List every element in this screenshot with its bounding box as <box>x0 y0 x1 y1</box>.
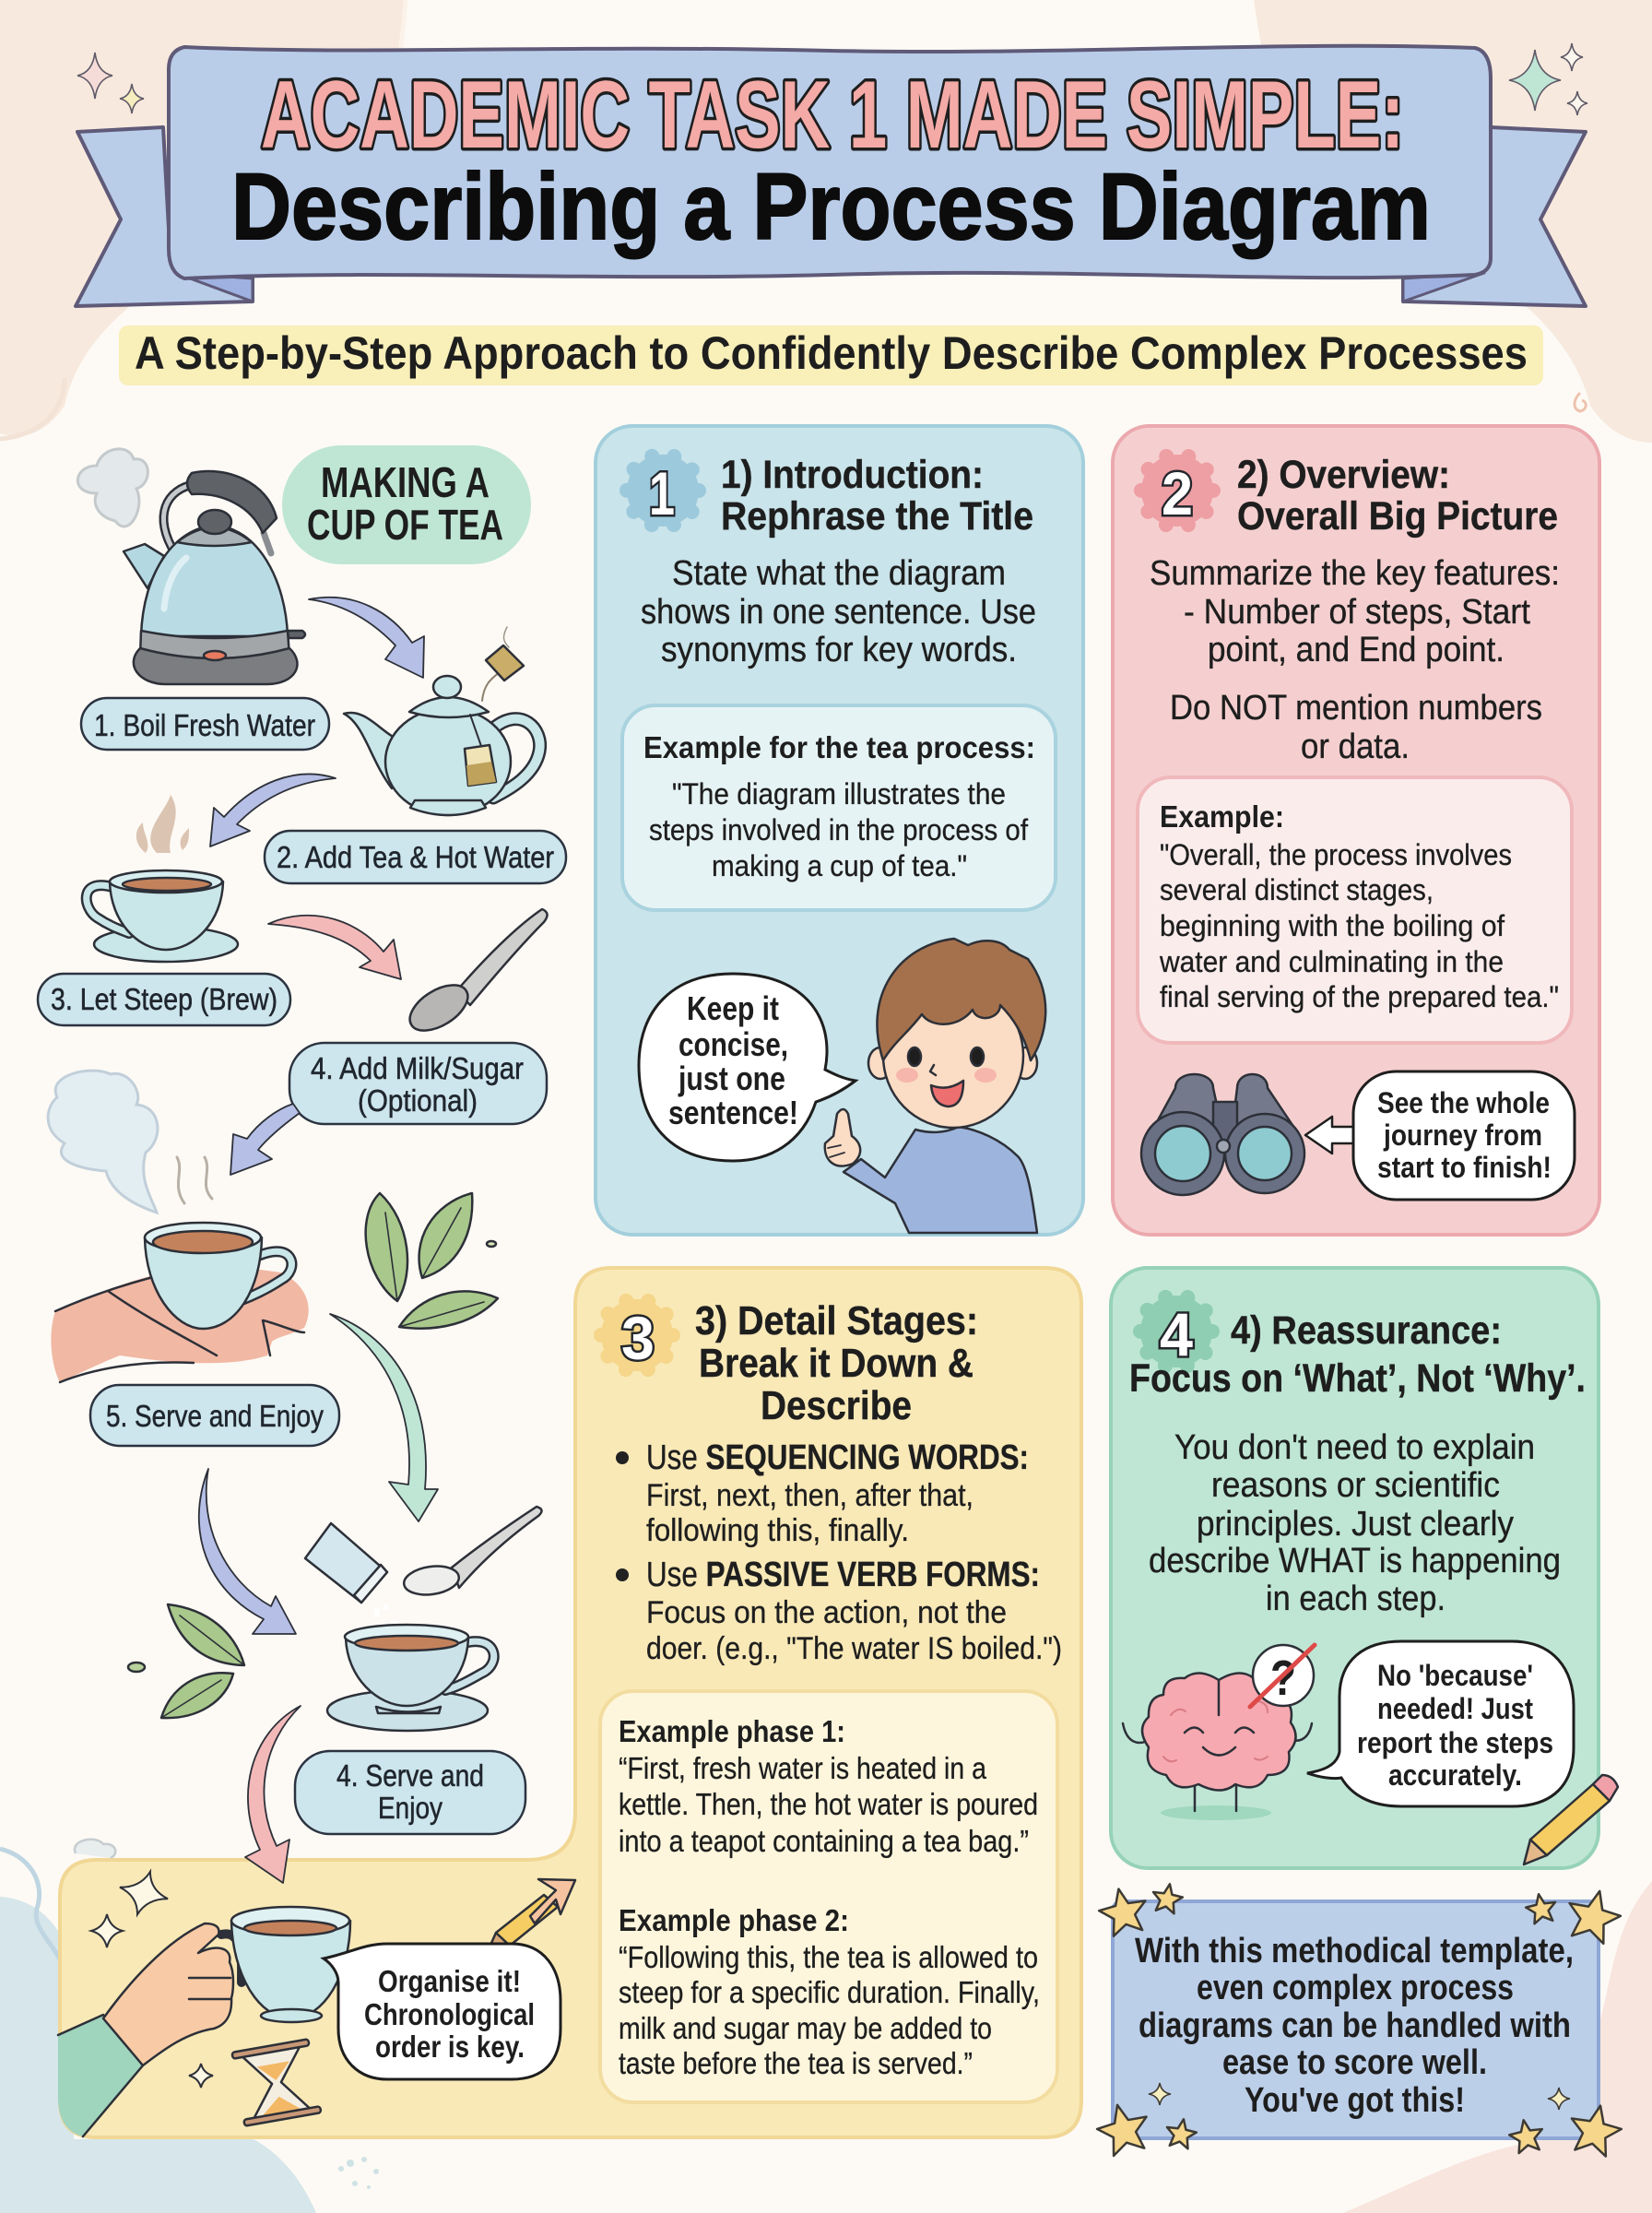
example phases box: “First, fresh water is heated in a <box>619 1751 987 1785</box>
tea process title pill: MAKING A <box>321 458 490 506</box>
panel 4 heading: 4) Reassurance: <box>1231 1308 1502 1353</box>
panel 2 body: Summarize the key features: <box>1150 554 1560 593</box>
sparkles top left <box>77 53 144 113</box>
example phases box: Example phase 1: <box>619 1714 845 1748</box>
icon: cup with saucer 2 <box>327 1625 494 1731</box>
question mark with red slash <box>1250 1645 1315 1707</box>
badge 2: 2 <box>1162 459 1193 527</box>
step 4b label: Enjoy <box>378 1791 442 1825</box>
bullet: sequencing words: First, next, then, after that, <box>646 1478 974 1513</box>
panel 3 heading: Describe <box>761 1383 912 1428</box>
icon: small spoon <box>402 1507 542 1598</box>
speech bubble: no because: No 'because' <box>1377 1659 1533 1692</box>
bullet: passive verb forms: Focus on the action, not the <box>646 1595 1007 1630</box>
icon: binoculars <box>1141 1074 1304 1195</box>
panel: 4 reassurance <box>1111 1268 1618 1868</box>
question mark with red slash: ? <box>1270 1651 1296 1706</box>
panel 1 background <box>596 426 1083 1235</box>
bullet: passive verb forms <box>616 1556 1062 1666</box>
step 4b label <box>295 1751 525 1834</box>
icon: sugar shaker <box>305 1523 387 1603</box>
icon: steam lines <box>177 1157 212 1203</box>
badge 1 <box>627 455 699 527</box>
subtitle band <box>119 325 1543 385</box>
example box: tea process <box>622 705 1056 910</box>
title line 2: Describing a Process Diagram <box>231 154 1431 259</box>
panel 2 body <box>1150 554 1560 766</box>
example phases box: kettle. Then, the hot water is poured <box>619 1787 1038 1821</box>
panel 4 background <box>1111 1268 1599 1868</box>
panel 1 heading: 1) Introduction: <box>721 453 984 497</box>
panel 4 heading <box>1129 1308 1586 1401</box>
panel: closing message <box>1092 1881 1625 2159</box>
example box: overview <box>1138 777 1572 1043</box>
panel 3 L-shaped background <box>60 1268 1081 2137</box>
panel 1 body: State what the diagram <box>672 554 1006 593</box>
panel 3 heading: Break it Down & <box>699 1341 974 1386</box>
icon: sugar granules <box>374 1604 397 1638</box>
panel: 2 overview <box>1113 426 1599 1235</box>
icon: sparkles <box>91 1866 213 2088</box>
example box: tea process: making a cup of tea." <box>712 849 967 882</box>
example box: tea process: steps involved in the process of <box>649 813 1028 846</box>
icon: brain character <box>1123 1645 1314 1820</box>
arrow: pink down arrow <box>245 1706 301 1883</box>
example box: overview: final serving of the prepared tea." <box>1160 980 1559 1013</box>
panel 2 heading: 2) Overview: <box>1237 453 1450 497</box>
badge 4: 4 <box>1160 1300 1193 1368</box>
closing text: ease to score well. <box>1222 2043 1487 2082</box>
arrow: green down arrow <box>330 1314 438 1521</box>
panel 2 body: point, and End point. <box>1208 631 1504 669</box>
step 5 label: 5. Serve and Enjoy <box>106 1399 324 1433</box>
panel 2 heading <box>1237 453 1558 538</box>
speech bubble: no because: needed! Just <box>1377 1692 1533 1725</box>
panel: 1 introduction <box>596 426 1083 1235</box>
panel 4 body: principles. Just clearly <box>1197 1505 1514 1544</box>
banner main <box>169 46 1491 278</box>
panel 4 body: You don't need to explain <box>1174 1428 1535 1467</box>
step 3 label: 3. Let Steep (Brew) <box>51 982 277 1016</box>
speech bubble: keep it concise: sentence! <box>668 1094 798 1131</box>
banner ribbon right tail <box>1403 127 1586 306</box>
example phases box: into a teapot containing a tea bag.” <box>619 1824 1029 1858</box>
panel 4 body <box>1149 1428 1561 1618</box>
closing panel background <box>1113 1901 1599 2138</box>
speech bubble: whole journey: start to finish! <box>1377 1151 1552 1184</box>
step 4 label: 4. Add Milk/Sugar <box>311 1051 524 1085</box>
panel 2 background <box>1113 426 1599 1235</box>
subtitle text: A Step-by-Step Approach to Confidently Describe Complex Processes <box>135 327 1528 379</box>
panel: 3 detail stages <box>58 1268 1081 2137</box>
icon: hourglass <box>232 2039 321 2126</box>
panel 3 heading <box>695 1298 978 1428</box>
speech bubble: organise it: Chronological <box>364 1997 535 2031</box>
title banner <box>76 46 1586 306</box>
example phases box: taste before the tea is served.” <box>619 2046 973 2080</box>
badge 1: 1 <box>649 459 675 527</box>
arrow: teapot to cup <box>210 775 336 846</box>
arrow: bubble to binoculars <box>1305 1117 1360 1154</box>
bullet: sequencing words: Use SEQUENCING WORDS: <box>646 1438 1029 1477</box>
example box: tea process: "The diagram illustrates the <box>672 777 1006 811</box>
step 3 label <box>38 974 290 1025</box>
icon: small steam <box>75 1840 115 1858</box>
panel: tea process <box>38 445 566 1834</box>
arrow: blue curved arrow <box>199 1469 296 1634</box>
example box: overview: "Overall, the process involves <box>1160 838 1512 871</box>
speech bubble: organise it: Organise it! <box>378 1964 521 1998</box>
icon: cup of tea with saucer <box>87 870 238 962</box>
panel 4 heading: Focus on ‘What’, Not ‘Why’. <box>1129 1356 1586 1401</box>
icon: pencil with arrow <box>485 1879 575 1958</box>
example phases box: “Following this, the tea is allowed to <box>619 1940 1038 1974</box>
icon: tea leaves lower <box>128 1604 244 1718</box>
panel 3 heading: 3) Detail Stages: <box>695 1298 978 1343</box>
panel 2 body: Do NOT mention numbers <box>1170 689 1542 728</box>
step 1 label <box>81 698 329 750</box>
step 5 label <box>90 1385 339 1446</box>
badge 2 <box>1141 455 1213 527</box>
icon: spoon <box>402 909 548 1040</box>
step 2 label: 2. Add Tea & Hot Water <box>277 840 554 874</box>
tea process title pill: CUP OF TEA <box>307 501 503 549</box>
speech bubble: keep it concise: concise, <box>678 1025 788 1063</box>
step 4 label <box>289 1043 547 1124</box>
example phases box: steep for a specific duration. Finally, <box>619 1975 1040 2009</box>
panel 1 body: shows in one sentence. Use <box>641 593 1036 632</box>
tea process title pill <box>282 445 531 564</box>
step 2 label <box>265 831 566 883</box>
icon: hand holding cup and sleeve <box>58 1907 350 2136</box>
panel 4 body: reasons or scientific <box>1211 1466 1500 1505</box>
closing text: With this methodical template, <box>1135 1932 1574 1970</box>
example box: tea process: Example for the tea process: <box>643 730 1035 764</box>
panel 2 body: - Number of steps, Start <box>1184 593 1530 632</box>
closing text: You've got this! <box>1245 2081 1465 2120</box>
speech bubble: keep it concise <box>639 974 856 1161</box>
panel 2 heading: Overall Big Picture <box>1237 494 1558 538</box>
icon: tea leaves top <box>366 1193 498 1329</box>
small swirl <box>1575 393 1586 411</box>
banner ribbon left tail <box>76 127 253 306</box>
icon: steam wisps <box>136 795 189 853</box>
bullet: sequencing words: following this, finally. <box>646 1513 909 1548</box>
speech bubble: keep it concise: Keep it <box>687 989 779 1027</box>
arrow: spoon to served cup <box>230 1104 300 1175</box>
example box: overview: several distinct stages, <box>1160 873 1434 906</box>
badge 3: 3 <box>621 1304 655 1372</box>
banner folds <box>175 273 1484 302</box>
example phases box <box>600 1691 1057 2102</box>
icon: steam cloud 2 <box>48 1071 158 1213</box>
speech bubble: no because <box>1307 1641 1574 1806</box>
example box: overview: water and culminating in the <box>1159 945 1504 978</box>
icon: boy pointing <box>825 939 1045 1233</box>
icon: teapot with tea bag <box>344 627 540 815</box>
example box: overview: beginning with the boiling of <box>1160 909 1504 942</box>
panel 4 body: describe WHAT is happening <box>1149 1542 1561 1580</box>
speech bubble: organise it: order is key. <box>375 2030 525 2064</box>
arrow: kettle to teapot <box>309 598 424 678</box>
closing text <box>1135 1932 1574 2120</box>
step 1 label: 1. Boil Fresh Water <box>94 708 315 742</box>
icon: gold stars <box>1092 1881 1625 2159</box>
closing text: even complex process <box>1197 1969 1514 2007</box>
bullet: sequencing words <box>616 1438 1029 1548</box>
panel 2 body: or data. <box>1301 728 1410 766</box>
panel 1 heading: Rephrase the Title <box>721 494 1033 538</box>
icon: hand holding cup <box>51 1223 309 1382</box>
badge 4 <box>1140 1296 1212 1368</box>
bullet: passive verb forms: doer. (e.g., "The water IS boiled.") <box>646 1631 1062 1666</box>
speech bubble: whole journey <box>1353 1071 1575 1200</box>
icon: steam cloud 1 <box>77 449 148 527</box>
panel 1 body <box>641 554 1036 669</box>
speech bubble: organise it <box>324 1944 560 2079</box>
arrow: cup to spoon <box>268 916 401 979</box>
step 4 label: (Optional) <box>358 1083 478 1118</box>
speech bubble: keep it concise: just one <box>678 1059 785 1097</box>
icon: small sparkles <box>1149 2083 1570 2110</box>
step 4b label: 4. Serve and <box>336 1758 484 1793</box>
speech bubble: whole journey: See the whole <box>1377 1086 1550 1119</box>
panel 1 heading <box>721 453 1033 538</box>
speech bubble: whole journey: journey from <box>1383 1118 1542 1152</box>
example phases box: Example phase 2: <box>619 1903 849 1937</box>
panel 4 body: in each step. <box>1266 1580 1446 1618</box>
speech bubble: no because: report the steps <box>1357 1726 1553 1759</box>
panel 1 body: synonyms for key words. <box>661 631 1017 669</box>
speech bubble: no because: accurately. <box>1388 1758 1522 1792</box>
sparkles top right <box>1509 43 1587 115</box>
bullet: passive verb forms: Use PASSIVE VERB FORMS: <box>646 1556 1040 1594</box>
example phases box: milk and sugar may be added to <box>619 2011 992 2045</box>
icon: pencil <box>1524 1775 1618 1864</box>
decorative dots <box>338 2157 379 2189</box>
closing text: diagrams can be handled with <box>1139 2006 1571 2045</box>
example box: overview: Example: <box>1160 799 1284 834</box>
badge 3 <box>601 1299 673 1372</box>
icon: electric kettle <box>124 471 305 684</box>
